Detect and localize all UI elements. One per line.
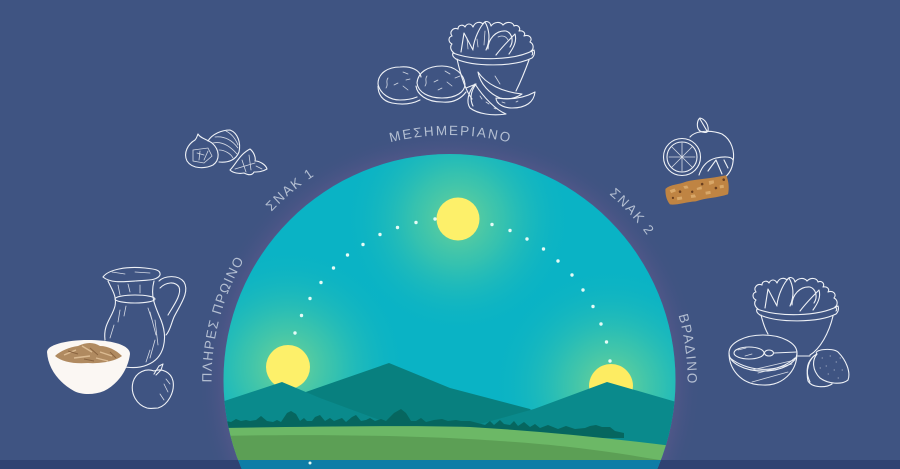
label: snack 2: ΣΝΑΚ 2	[610, 188, 654, 235]
sun: morning	[266, 345, 310, 389]
label: dinner: ΒΡΑΔΙΝΟ	[678, 314, 697, 383]
icon: patties	[378, 66, 466, 104]
label: full breakfast: ΠΛΗΡΕΣ ΠΡΩΙΝΟ	[202, 258, 242, 382]
icon: figs and mint	[186, 130, 267, 175]
sun path dots	[293, 217, 612, 464]
icon: orange	[664, 118, 734, 178]
sun: evening	[589, 364, 633, 390]
dome halo	[197, 128, 702, 460]
sun: noon	[436, 198, 480, 240]
icon: cereal bowl	[47, 340, 130, 394]
icon: potato wedges	[466, 72, 535, 115]
icon: apple	[132, 364, 173, 408]
back mountain	[306, 363, 531, 424]
label: lunch: ΜΕΣΗΜΕΡΙΑΝΟ	[390, 126, 510, 142]
left mountain	[224, 382, 378, 436]
icon: dinner salad bowl	[753, 278, 838, 356]
sky	[220, 150, 680, 469]
icon: granola bar	[664, 175, 730, 206]
grass shade	[220, 435, 660, 460]
tree line	[226, 409, 624, 438]
label: snack 1: ΣΝΑΚ 1	[265, 170, 314, 212]
icon: bread	[807, 349, 849, 387]
sky dome illustration	[215, 150, 680, 469]
icon: milk jug	[103, 267, 186, 368]
icon: lunch salad bowl	[449, 22, 534, 99]
sun glows	[224, 154, 676, 410]
grass	[220, 426, 680, 461]
icon: salmon steak	[729, 335, 797, 385]
right mountain	[480, 382, 680, 450]
bottom band	[0, 460, 900, 469]
water strip	[220, 460, 680, 469]
